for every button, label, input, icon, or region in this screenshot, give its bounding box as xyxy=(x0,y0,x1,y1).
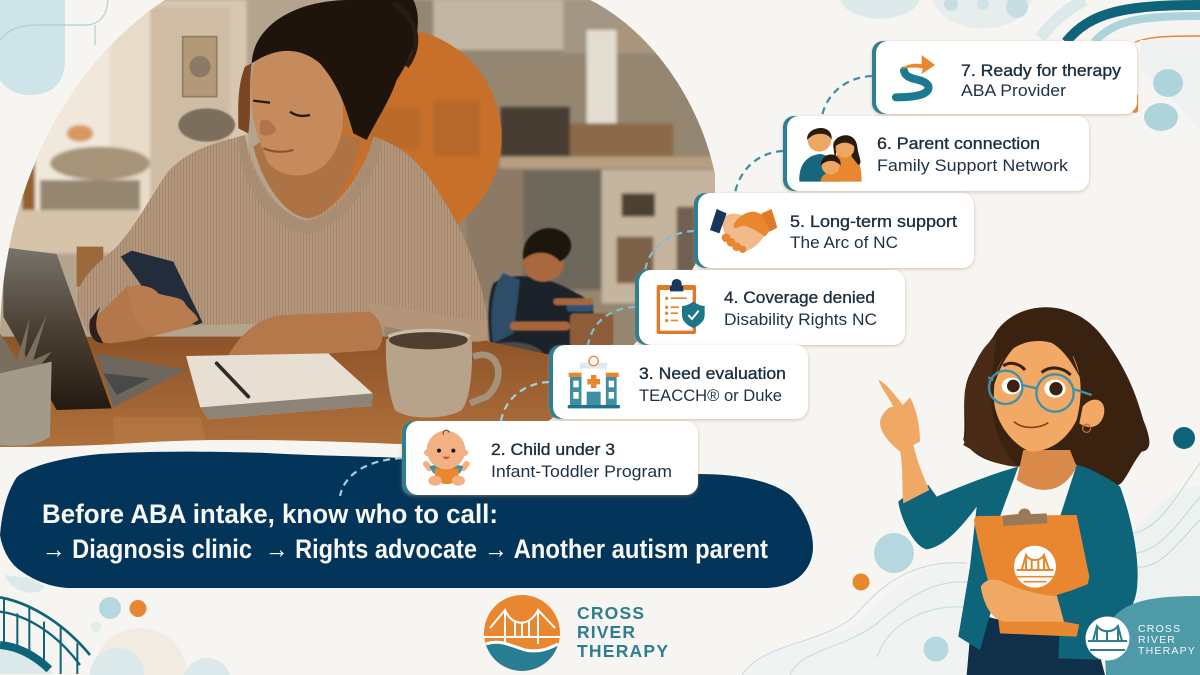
photo: succulent and pot xyxy=(0,315,52,373)
logo wordmark: RIVER xyxy=(577,622,635,642)
banner contacts: → Diagnosis clinic xyxy=(42,534,252,564)
text: step 4 xyxy=(724,288,877,329)
card 6: parent connection xyxy=(783,116,1089,191)
photo: child xyxy=(488,228,613,363)
woman: back hair xyxy=(963,307,1149,485)
logo wordmark: CROSS xyxy=(577,603,644,623)
text: step 6: 6. Parent connection xyxy=(877,134,1040,153)
watermark wordmark xyxy=(1138,623,1196,657)
text: step 3 xyxy=(639,364,786,405)
text: step 5: The Arc of NC xyxy=(790,234,898,252)
text: step 3: TEACCH® or Duke xyxy=(639,387,782,405)
icon: clipboard with shield xyxy=(657,279,705,334)
photo: hair xyxy=(252,0,418,140)
photo: phone xyxy=(121,251,203,325)
card 3: need evaluation xyxy=(549,345,808,419)
woman: pants xyxy=(967,617,1105,675)
woman: holding hand and arm xyxy=(981,580,1065,622)
card 4: coverage denied xyxy=(635,270,905,345)
woman: fringe hair xyxy=(993,332,1082,387)
decoration: bridge bottom left xyxy=(0,597,90,674)
woman: shirt and neck xyxy=(1003,480,1073,517)
photo: wall art and plant xyxy=(183,37,217,97)
icon: winding road arrow xyxy=(896,55,935,97)
woman: clipboard xyxy=(974,508,1089,637)
woman: glasses and eyes xyxy=(988,363,1092,412)
icon: hospital xyxy=(568,356,620,408)
photo: neck and face xyxy=(253,133,362,218)
text: step 2: 2. Child under 3 xyxy=(491,440,615,459)
text: step 3: 3. Need evaluation xyxy=(639,364,786,383)
illustration: woman pointing with clipboard xyxy=(878,307,1149,675)
photo: mug xyxy=(470,355,498,403)
logo wordmark xyxy=(577,603,668,661)
watermark wordmark: RIVER xyxy=(1138,634,1176,646)
photo: woman sweater xyxy=(77,135,488,343)
connector: card 4 to card 3 xyxy=(588,307,635,345)
woman: pointing hand xyxy=(878,380,920,452)
banner: before ABA intake xyxy=(0,452,813,588)
text: step 7: 7. Ready for therapy xyxy=(961,61,1122,80)
card 7: ready for therapy xyxy=(872,41,1137,114)
text: step 5 xyxy=(790,212,957,252)
connector: card 5 to card 4 xyxy=(645,231,694,270)
photo: mother at kitchen table with child behind xyxy=(0,0,733,467)
photo: orange circle xyxy=(318,31,502,224)
connector: card 7 to card 6 xyxy=(822,76,872,116)
text: step 6 xyxy=(877,134,1069,175)
logo: Cross River Therapy xyxy=(484,595,668,671)
decoration: top left blobs xyxy=(0,0,108,95)
card 2: child under 3 xyxy=(402,421,698,495)
photo: window and wall xyxy=(0,0,247,253)
watermark wordmark: CROSS xyxy=(1138,623,1181,635)
photo: kitchen background xyxy=(382,0,715,345)
photo: laptop xyxy=(97,353,185,407)
text: step 6: Family Support Network xyxy=(877,157,1069,175)
text: step 7: ABA Provider xyxy=(961,82,1067,100)
photo: table xyxy=(0,336,554,447)
photo: notebook and pen xyxy=(186,353,373,419)
decoration: waves and bubbles right xyxy=(742,427,1200,675)
text: step 4: 4. Coverage denied xyxy=(724,288,875,307)
text: step 7 xyxy=(961,61,1122,100)
watermark wordmark: THERAPY xyxy=(1138,645,1196,657)
banner contacts: → Rights advocate xyxy=(265,534,477,564)
decoration: top right arcs and bubbles xyxy=(840,0,1200,131)
woman: pointing arm xyxy=(900,445,929,503)
icon: baby xyxy=(424,430,468,486)
text: step 5: 5. Long-term support xyxy=(790,212,957,231)
banner contacts xyxy=(42,534,768,564)
woman: cardigan xyxy=(898,465,1138,660)
woman: face xyxy=(994,341,1081,452)
connector: card 3 to card 2 xyxy=(501,382,549,421)
icon: family xyxy=(799,128,862,182)
icon: handshake xyxy=(710,209,777,253)
banner contacts: → Another autism parent xyxy=(484,534,768,564)
text: step 2: Infant-Toddler Program xyxy=(491,463,672,481)
woman: mouth xyxy=(1014,422,1048,427)
watermark: teal logo corner xyxy=(1086,596,1200,675)
connector: card 6 to card 5 xyxy=(735,151,783,193)
text: step 2 xyxy=(491,440,672,481)
card 5: long-term support xyxy=(694,193,974,268)
connector: card 2 to banner xyxy=(340,458,402,496)
decoration: bubbles bottom left xyxy=(5,575,230,675)
text: step 4: Disability Rights NC xyxy=(724,311,877,329)
photo: arms and hands xyxy=(94,283,200,343)
banner heading: Before ABA intake, know who to call: xyxy=(42,499,498,529)
logo wordmark: THERAPY xyxy=(577,641,668,661)
